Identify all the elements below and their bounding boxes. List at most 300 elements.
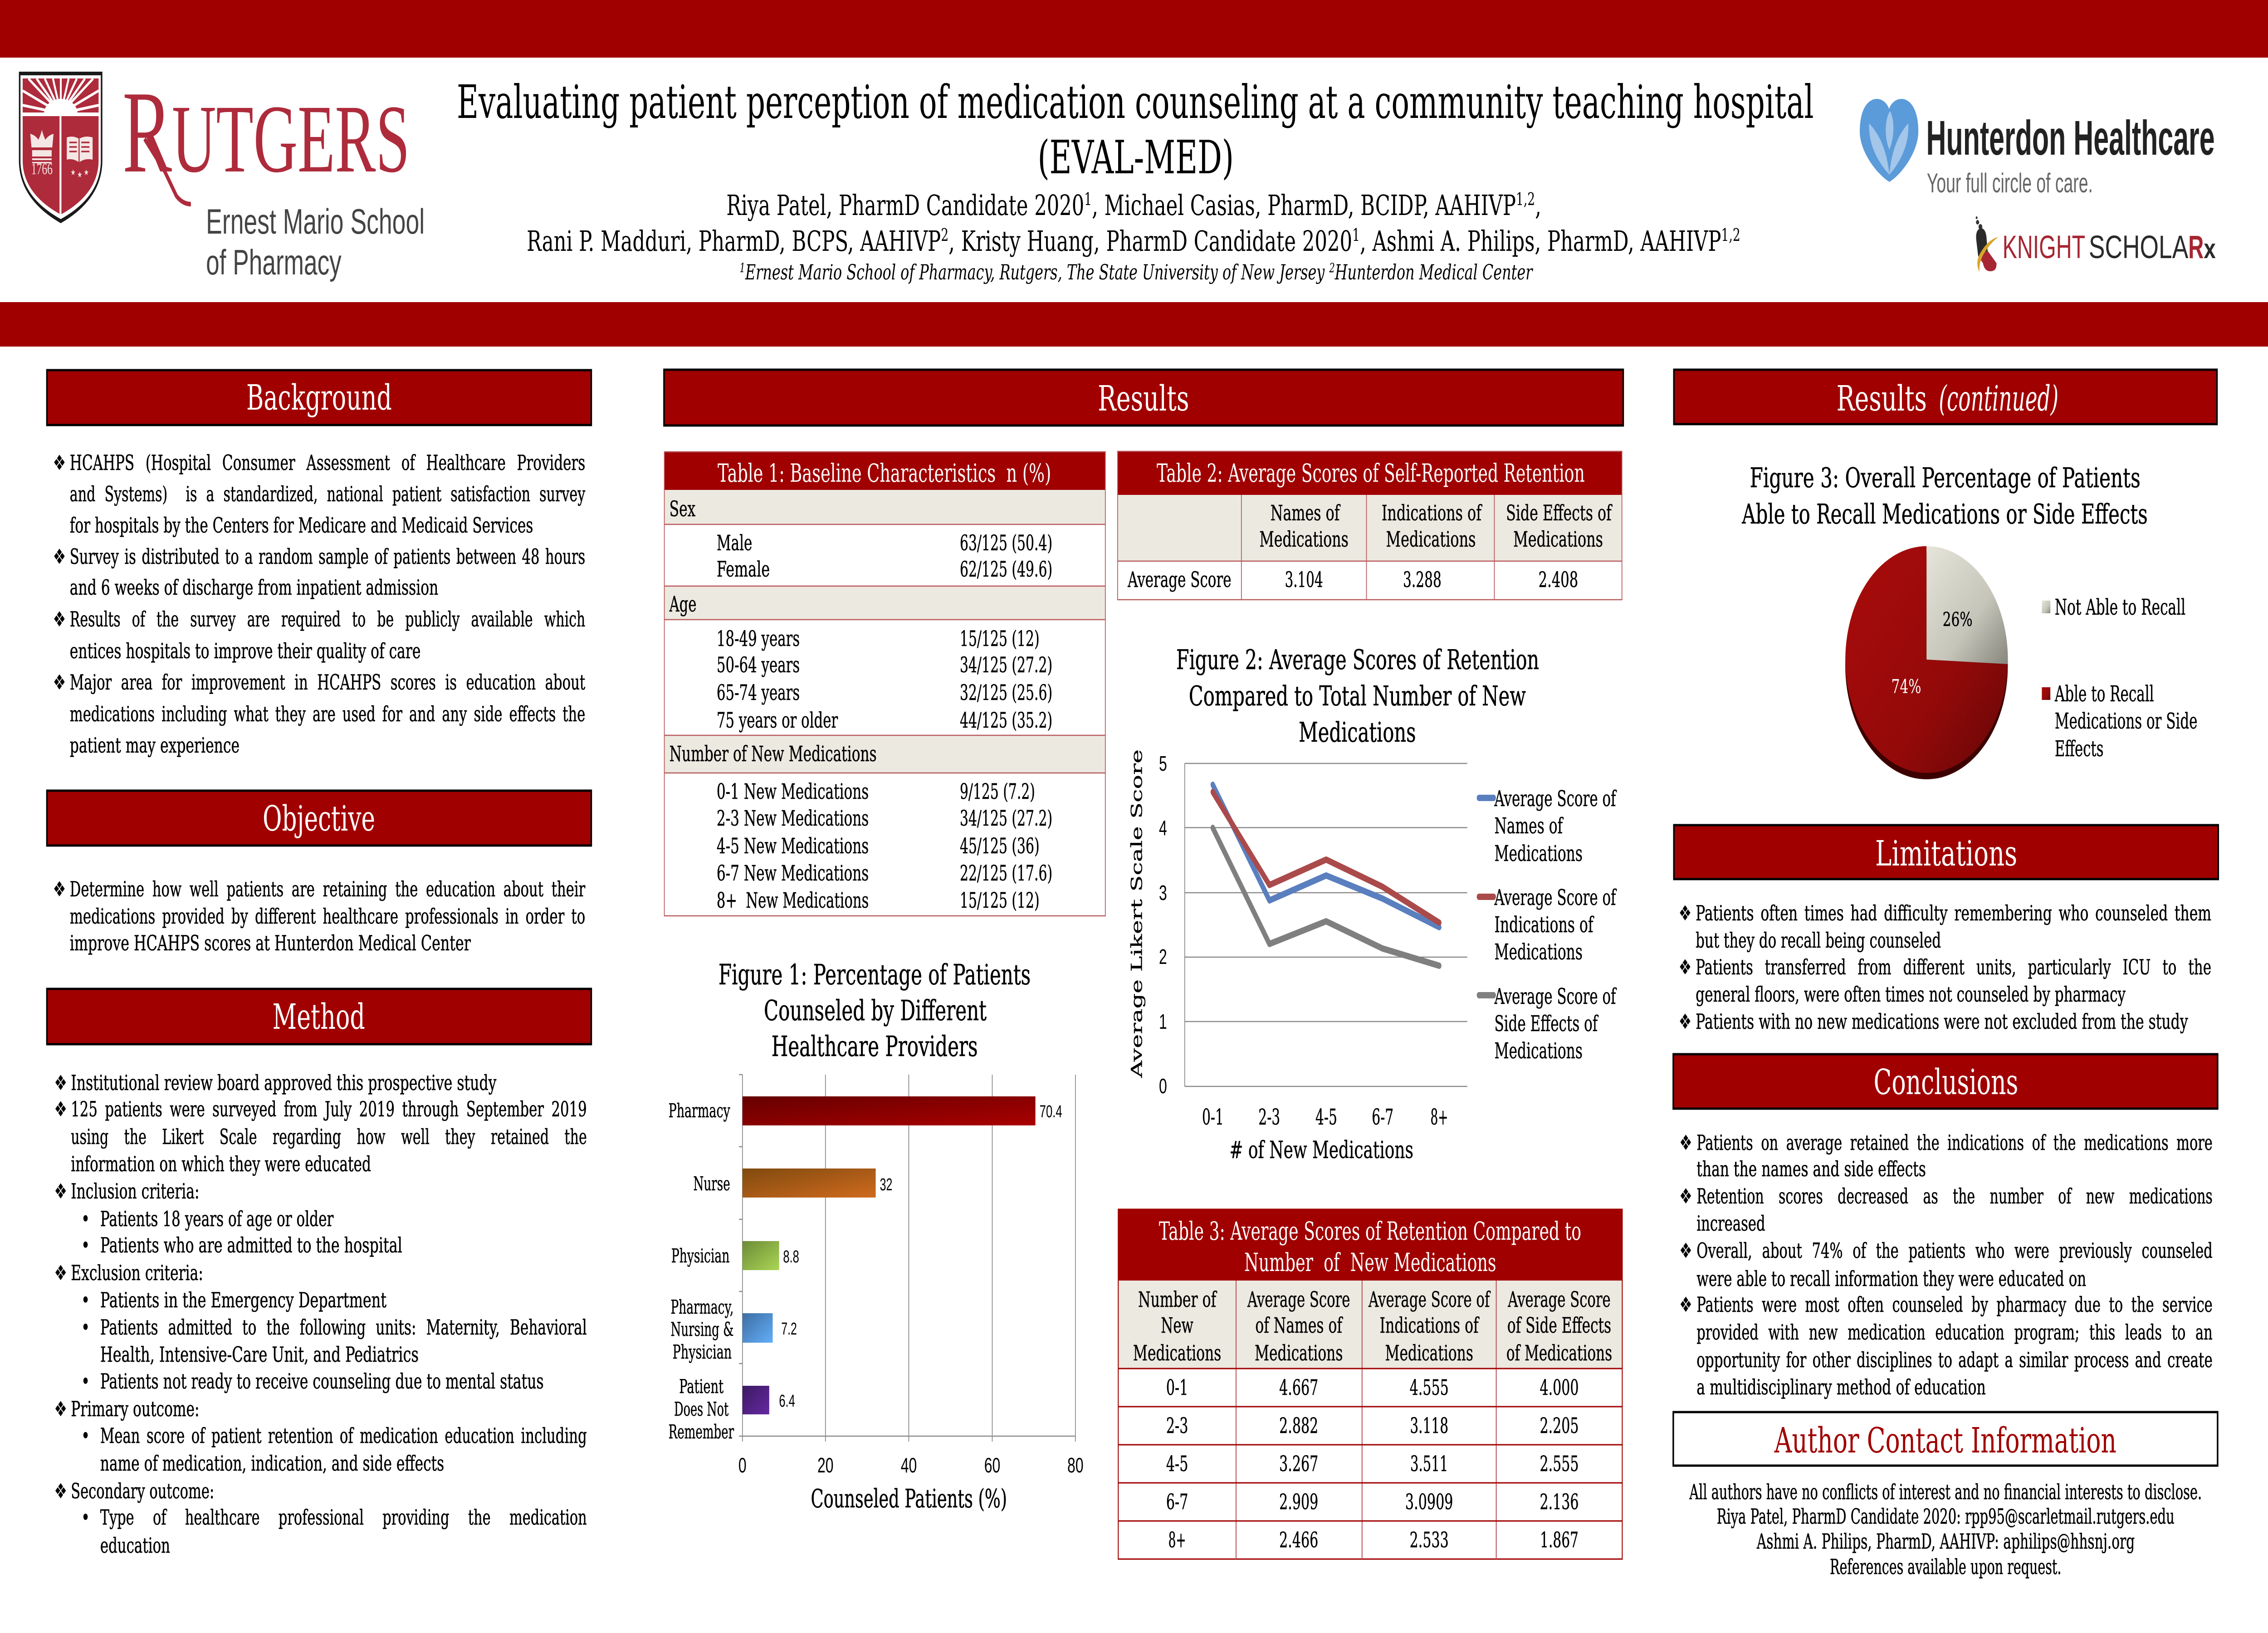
x axis title: Counseled Patients (%) bbox=[811, 1484, 1007, 1514]
table 1 rows: 75 years or older bbox=[717, 708, 838, 733]
category labels: Physician bbox=[673, 1341, 732, 1363]
category labels: Nurse bbox=[693, 1173, 730, 1195]
table 2 column headers: Medications bbox=[1386, 527, 1476, 552]
figure 1 title bbox=[719, 958, 1031, 1063]
table 3 values: 4-5 bbox=[1166, 1451, 1188, 1477]
authors: Rani P. Madduri, PharmD, BCPS, AAHIVP bbox=[527, 225, 938, 258]
table 2: self-reported retention bbox=[1118, 451, 1622, 600]
table 2 column headers: Side Effects of bbox=[1506, 500, 1613, 526]
lower banner bbox=[0, 302, 2268, 347]
table 1 rows: 2-3 New Medications bbox=[717, 806, 869, 831]
heading: objective bbox=[47, 791, 591, 846]
table 1 rows: 6-7 New Medications bbox=[717, 861, 869, 886]
series: indications of medications bbox=[1213, 792, 1439, 923]
table 3 values: 0-1 bbox=[1166, 1375, 1188, 1400]
affiliations: 1 bbox=[740, 260, 745, 275]
x axis labels bbox=[1202, 1105, 1448, 1130]
text block: limitations bullets: general floors, were often times not counseled by pharmacy bbox=[1696, 983, 2126, 1007]
bar: physician bbox=[743, 1241, 779, 1270]
table 3 values: 2.136 bbox=[1540, 1489, 1579, 1515]
logo: KnightScholaRx: x bbox=[2204, 233, 2216, 264]
table 2 column headers: Names of bbox=[1271, 500, 1341, 526]
table 1 rows: 18-49 years bbox=[717, 626, 800, 651]
bar: pharmacy bbox=[743, 1096, 1036, 1125]
icon: heart with leaves bbox=[1860, 99, 1918, 182]
table 3 column headers: Average Score bbox=[1508, 1287, 1611, 1312]
text block: contact details: References available upon request. bbox=[1830, 1555, 2061, 1579]
x axis labels: 2-3 bbox=[1258, 1105, 1280, 1130]
text block: method bullets: Inclusion criteria: bbox=[71, 1179, 200, 1204]
text block: conclusions bullets: ❖ bbox=[1679, 1131, 1692, 1155]
table 3 values: 2.909 bbox=[1279, 1489, 1318, 1515]
text block: conclusions bullets: Overall, about 74% of the patients who were previously counseled bbox=[1696, 1239, 2213, 1263]
text block: objective: ❖ bbox=[53, 877, 66, 902]
text block: limitations bullets: ❖ bbox=[1679, 901, 1691, 926]
text block: method bullets: • bbox=[81, 1233, 90, 1258]
text block: background bullets: ❖ bbox=[53, 670, 66, 695]
category labels: Pharmacy bbox=[669, 1100, 730, 1122]
text block: method bullets: Patients admitted to the following units: Maternity, Behavioral bbox=[100, 1315, 587, 1340]
text block: limitations bullets: ❖ bbox=[1679, 1010, 1691, 1034]
text block: method bullets: Patients 18 years of age or older bbox=[100, 1207, 333, 1232]
text block: conclusions bullets: ❖ bbox=[1679, 1293, 1692, 1317]
chart: figure 3 pie chart bbox=[1741, 462, 2197, 779]
logo: Rutgers Ernest Mario School of Pharmacy bbox=[19, 67, 425, 282]
text block: limitations bullets: ❖ bbox=[1679, 955, 1691, 980]
table 3 column headers: New bbox=[1161, 1313, 1193, 1338]
heading: limitations bbox=[1674, 825, 2218, 879]
y axis labels: 0 bbox=[1159, 1075, 1167, 1098]
category labels: Physician bbox=[671, 1245, 729, 1267]
authors: , bbox=[1535, 189, 1541, 222]
x axis labels: 0 bbox=[738, 1454, 747, 1477]
table 3 column headers: of Names of bbox=[1255, 1313, 1343, 1338]
text block: method bullets: • bbox=[81, 1288, 90, 1313]
legend: Names of bbox=[1494, 813, 1564, 839]
table 1 rows: 15/125 (12) bbox=[960, 626, 1040, 651]
table 3 column headers: of Medications bbox=[1506, 1340, 1612, 1366]
panel: author contact information bbox=[1673, 1412, 2218, 1579]
text block: method bullets: Mean score of patient retention of medication education including bbox=[100, 1424, 587, 1448]
school name: of Pharmacy bbox=[206, 243, 342, 282]
table 3 values: 4.667 bbox=[1279, 1375, 1318, 1400]
table 1 rows: 9/125 (7.2) bbox=[960, 779, 1035, 804]
text block: conclusions bullets: Retention scores decreased as the number of new medications bbox=[1696, 1184, 2213, 1209]
text block: method bullets: Patients in the Emergency Department bbox=[100, 1288, 386, 1313]
text block: background bullets bbox=[53, 451, 586, 758]
text block: method bullets: Health, Intensive-Care Unit, and Pediatrics bbox=[100, 1343, 419, 1367]
table 3 values: 8+ bbox=[1168, 1527, 1186, 1553]
series: names of medications bbox=[1213, 785, 1439, 927]
table 1 rows: 4-5 New Medications bbox=[717, 833, 869, 859]
table 3 values: 2.466 bbox=[1279, 1527, 1318, 1553]
heading: objective: Objective bbox=[263, 798, 375, 839]
text block: method bullets: Type of healthcare professional providing the medication bbox=[100, 1506, 587, 1530]
title: (EVAL-MED) bbox=[1038, 131, 1234, 184]
affiliations: Hunterdon Medical Center bbox=[1334, 260, 1533, 285]
text block: background bullets: ❖ bbox=[53, 451, 66, 475]
text block: method bullets: Secondary outcome: bbox=[71, 1479, 214, 1504]
x axis labels: 8+ bbox=[1430, 1105, 1448, 1130]
table 1 rows: 15/125 (12) bbox=[960, 888, 1040, 913]
text block: method bullets: education bbox=[100, 1534, 170, 1558]
text block: conclusions bullets: ❖ bbox=[1679, 1239, 1692, 1263]
text block: method bullets: name of medication, indication, and side effects bbox=[100, 1452, 444, 1476]
y axis labels: 1 bbox=[1159, 1010, 1167, 1033]
table 1 rows: 44/125 (35.2) bbox=[960, 708, 1052, 733]
text block: conclusions bullets: opportunity for other disciplines to adapt a similar process and create bbox=[1696, 1348, 2213, 1373]
data labels: 8.8 bbox=[783, 1247, 799, 1266]
category labels: Nursing & bbox=[670, 1318, 733, 1340]
text block: background bullets: Survey is distributed to a random sample of patients between 48 hours bbox=[70, 545, 585, 569]
authors: 1 bbox=[1352, 225, 1360, 245]
x axis title: # of New Medications bbox=[1229, 1136, 1413, 1164]
text block: method bullets: ❖ bbox=[54, 1397, 67, 1422]
text block: limitations bullets: Patients often times had difficulty remembering who counseled them bbox=[1696, 901, 2211, 926]
text block: conclusions bullets bbox=[1679, 1131, 2213, 1400]
text block: objective: medications provided by different healthcare professionals in order to bbox=[70, 905, 585, 929]
table 1 rows: Male bbox=[717, 530, 752, 556]
affiliations: Ernest Mario School of Pharmacy, Rutgers, The State University of New Jersey bbox=[745, 260, 1329, 285]
table 1 rows: Age bbox=[669, 592, 696, 617]
authors bbox=[527, 189, 1740, 258]
pie depth bbox=[1845, 552, 2008, 779]
table 3 values: 3.511 bbox=[1410, 1451, 1448, 1477]
text block: conclusions bullets: ❖ bbox=[1679, 1184, 1692, 1209]
y axis labels bbox=[1159, 752, 1167, 1098]
x axis labels: 80 bbox=[1067, 1454, 1084, 1477]
table 3 column headers: Indications of bbox=[1380, 1313, 1480, 1338]
data labels: 70.4 bbox=[1040, 1101, 1062, 1121]
text block: method bullets: Patients who are admitted to the hospital bbox=[100, 1233, 402, 1258]
text block: limitations bullets: Patients with no new medications were not excluded from the study bbox=[1696, 1010, 2188, 1034]
table 3 column headers: Average Score of bbox=[1368, 1287, 1491, 1312]
slice label: 74%: 74% bbox=[1891, 675, 1921, 698]
data labels: 7.2 bbox=[781, 1319, 797, 1338]
data labels: 6.4 bbox=[779, 1391, 795, 1410]
y axis labels: 5 bbox=[1159, 752, 1167, 775]
table 3 values: 4.000 bbox=[1540, 1375, 1579, 1400]
text block: method bullets: • bbox=[81, 1207, 90, 1232]
legend: Average Score of bbox=[1494, 984, 1617, 1009]
text block: background bullets: Results of the survey are required to be publicly available which bbox=[70, 607, 585, 632]
top banner bbox=[0, 0, 2268, 58]
heading: method bbox=[47, 989, 591, 1044]
title bbox=[457, 75, 1814, 184]
table 3 column headers: Medications bbox=[1133, 1340, 1221, 1366]
figure 2 title: Medications bbox=[1299, 717, 1416, 748]
series: side effects of medications bbox=[1213, 828, 1439, 966]
table 3 column headers: Medications bbox=[1385, 1340, 1473, 1366]
figure 3 title bbox=[1741, 462, 2148, 530]
text block: background bullets: patient may experience bbox=[70, 733, 240, 758]
text block: method bullets: ❖ bbox=[54, 1479, 67, 1504]
table 2 values: Average Score bbox=[1127, 567, 1232, 592]
legend: Effects bbox=[2055, 736, 2104, 762]
table 1 rows: Number of New Medications bbox=[670, 741, 877, 767]
category labels: Does Not bbox=[674, 1398, 729, 1420]
table 3 values: 2.533 bbox=[1410, 1527, 1449, 1553]
icon: Rutgers shield: 1766 bbox=[31, 159, 53, 178]
table 3 values: 2.205 bbox=[1540, 1413, 1579, 1438]
figure 1 title: Counseled by Different bbox=[764, 994, 987, 1027]
y axis labels: 4 bbox=[1159, 816, 1167, 840]
heading: author contact information bbox=[1673, 1412, 2218, 1466]
table 3 values: 6-7 bbox=[1166, 1489, 1188, 1515]
icon: Rutgers shield: ★ bbox=[77, 170, 82, 180]
figure 2 title: Figure 2: Average Scores of Retention bbox=[1176, 644, 1539, 676]
legend: Side Effects of bbox=[1494, 1011, 1598, 1037]
legend: Average Score of bbox=[1494, 786, 1617, 812]
title: Evaluating patient perception of medication counseling at a community teaching hospital bbox=[457, 75, 1814, 129]
legend: Indications of bbox=[1494, 912, 1594, 938]
authors: 1,2 bbox=[1516, 189, 1535, 209]
icon: Rutgers shield: ★ bbox=[84, 168, 89, 177]
table 3 heading: Table 3: Average Scores of Retention Compared to bbox=[1159, 1217, 1581, 1246]
heading: conclusions bbox=[1673, 1054, 2218, 1109]
table 2 column headers: Indications of bbox=[1382, 500, 1482, 526]
slice: not able to recall bbox=[1926, 546, 2008, 664]
bar: nurse bbox=[743, 1169, 876, 1198]
table 3 values: 1.867 bbox=[1540, 1527, 1579, 1553]
wordmark: Rutgers: RUTGERS bbox=[122, 67, 410, 197]
heading: background: Background bbox=[246, 377, 392, 418]
table 2 values: 3.288 bbox=[1403, 567, 1442, 592]
table 1 rows: 62/125 (49.6) bbox=[960, 557, 1052, 582]
text block: method bullets bbox=[54, 1071, 587, 1558]
figure 2 title: Compared to Total Number of New bbox=[1189, 680, 1526, 712]
table 1: baseline characteristics bbox=[665, 452, 1105, 916]
table 3 heading bbox=[1159, 1217, 1581, 1277]
x axis labels bbox=[738, 1454, 1084, 1477]
table 1 rows: 34/125 (27.2) bbox=[960, 806, 1052, 831]
authors: 1 bbox=[1084, 189, 1092, 209]
table 1 rows: 34/125 (27.2) bbox=[960, 652, 1052, 678]
category labels: Remember bbox=[669, 1421, 734, 1443]
panel: method bbox=[47, 989, 591, 1558]
table 1 heading: Table 1: Baseline Characteristics n (%) bbox=[718, 459, 1051, 488]
table 2 values bbox=[1127, 567, 1578, 592]
table 1 rows: 0-1 New Medications bbox=[717, 779, 869, 804]
text block: background bullets: ❖ bbox=[53, 545, 66, 569]
legend: Not Able to Recall bbox=[2055, 595, 2185, 620]
data labels bbox=[779, 1101, 1062, 1410]
table 3 column headers: Medications bbox=[1255, 1340, 1343, 1366]
table 3 values: 3.0909 bbox=[1405, 1489, 1453, 1515]
legend: Medications bbox=[1494, 841, 1583, 866]
bar: patient does not remember bbox=[743, 1386, 769, 1414]
text block: background bullets: HCAHPS (Hospital Consumer Assessment of Healthcare Providers bbox=[70, 451, 585, 475]
text block: method bullets: Institutional review board approved this prospective study bbox=[71, 1071, 497, 1095]
slice: able to recall bbox=[1845, 546, 2008, 773]
text block: method bullets: • bbox=[81, 1369, 90, 1394]
authors: 1,2 bbox=[1721, 225, 1740, 245]
category labels: Patient bbox=[679, 1375, 723, 1398]
text block: conclusions bullets: than the names and side effects bbox=[1696, 1157, 1926, 1182]
affiliations: 2 bbox=[1329, 260, 1335, 275]
x axis labels: 0-1 bbox=[1202, 1105, 1224, 1130]
x axis labels: 20 bbox=[817, 1454, 834, 1477]
text block: background bullets: medications including what they are used for and any side effects the bbox=[70, 702, 585, 727]
table 1 rows: Female bbox=[717, 557, 770, 582]
legend bbox=[1479, 786, 1617, 1064]
table 1 rows: 63/125 (50.4) bbox=[960, 530, 1052, 556]
heading: conclusions: Conclusions bbox=[1874, 1061, 2018, 1103]
figure 3 title: Figure 3: Overall Percentage of Patients bbox=[1750, 462, 2141, 494]
slice label: 26%: 26% bbox=[1943, 608, 1973, 631]
y axis labels: 3 bbox=[1159, 881, 1167, 905]
text block: background bullets: ❖ bbox=[53, 607, 66, 632]
text block: method bullets: • bbox=[81, 1506, 90, 1530]
text block: limitations bullets bbox=[1679, 901, 2211, 1034]
chart: figure 2 line chart bbox=[1128, 644, 1617, 1164]
table 1 rows: 65-74 years bbox=[717, 680, 800, 705]
table 3: retention by number of new medications bbox=[1118, 1209, 1622, 1559]
x axis labels: 4-5 bbox=[1315, 1105, 1337, 1130]
table 3 column headers bbox=[1133, 1287, 1612, 1366]
table 1 rows: Sex bbox=[670, 496, 695, 522]
category labels bbox=[669, 1100, 734, 1443]
text block: method bullets: ❖ bbox=[54, 1261, 67, 1286]
text block: method bullets: using the Likert Scale regarding how well they retained the bbox=[71, 1125, 587, 1149]
table 2 heading: Table 2: Average Scores of Self-Reported Retention bbox=[1157, 459, 1585, 488]
text block: objective: improve HCAHPS scores at Hunterdon Medical Center bbox=[70, 931, 471, 956]
logo: KnightScholaRx bbox=[1976, 216, 2216, 272]
text block: method bullets: Primary outcome: bbox=[71, 1397, 200, 1422]
logo: KnightScholaRx: KNIGHT bbox=[2003, 229, 2085, 265]
figure 1 title: Healthcare Providers bbox=[772, 1030, 978, 1063]
text block: conclusions bullets: provided with new medication education program; this leads to an bbox=[1696, 1320, 2213, 1345]
text block: method bullets: Patients not ready to receive counseling due to mental status bbox=[100, 1369, 544, 1394]
table 2 column headers: Medications bbox=[1513, 527, 1603, 552]
heading: results: Results bbox=[1098, 378, 1189, 419]
text block: background bullets: and 6 weeks of discharge from inpatient admission bbox=[70, 576, 438, 600]
heading: results continued bbox=[1674, 370, 2217, 424]
heading: results continued: (continued) bbox=[1939, 378, 2058, 419]
heading: background bbox=[47, 370, 591, 425]
text block: background bullets: and Systems) is a standardized, national patient satisfaction survey bbox=[70, 482, 586, 507]
heading: method: Method bbox=[273, 996, 365, 1037]
panel: conclusions bbox=[1673, 1054, 2218, 1400]
category labels: Pharmacy, bbox=[670, 1296, 733, 1318]
text block: limitations bullets: but they do recall being counseled bbox=[1696, 929, 1941, 953]
table 2 column headers: Medications bbox=[1259, 527, 1349, 552]
text block: contact details: All authors have no conflicts of interest and no financial interests to disclose. bbox=[1689, 1480, 2202, 1505]
table 3 column headers: of Side Effects bbox=[1507, 1313, 1611, 1338]
logo: KnightScholaRx: R bbox=[2188, 229, 2204, 265]
text block: conclusions bullets: were able to recall information they were educated on bbox=[1696, 1267, 2086, 1291]
text block: method bullets: 125 patients were surveyed from July 2019 through September 2019 bbox=[71, 1097, 587, 1122]
bar: pharmacy, nursing and physician bbox=[743, 1313, 772, 1343]
text block: contact details bbox=[1689, 1480, 2202, 1579]
authors: , Michael Casias, PharmD, BCIDP, AAHIVP bbox=[1092, 189, 1516, 222]
text block: method bullets: Exclusion criteria: bbox=[71, 1261, 203, 1286]
panel: limitations bbox=[1674, 825, 2218, 1034]
chart: figure 1 bar chart bbox=[669, 958, 1084, 1514]
legend: Medications bbox=[1494, 1038, 1583, 1064]
table 3 column headers: Number of bbox=[1138, 1287, 1217, 1312]
panel: background bbox=[47, 370, 591, 758]
table 3 values bbox=[1166, 1375, 1579, 1553]
legend: Medications or Side bbox=[2055, 709, 2197, 734]
table 1 rows: 8+ New Medications bbox=[717, 888, 869, 913]
heading: author contact information: Author Contact Information bbox=[1774, 1420, 2116, 1461]
text block: background bullets: entices hospitals to improve their quality of care bbox=[70, 639, 420, 664]
text block: conclusions bullets: Patients were most often counseled by pharmacy due to the service bbox=[1696, 1293, 2213, 1317]
logo: Hunterdon Healthcare: Your full circle of care. bbox=[1927, 167, 2093, 198]
figure 2 title bbox=[1176, 644, 1539, 748]
text block: objective bbox=[53, 877, 585, 956]
table 1 rows: 50-64 years bbox=[717, 652, 800, 678]
x axis labels: 60 bbox=[984, 1454, 1000, 1477]
legend: Able to Recall bbox=[2054, 681, 2154, 707]
figure 1 title: Figure 1: Percentage of Patients bbox=[719, 958, 1031, 991]
text block: contact details: Riya Patel, PharmD Candidate 2020: rpp95@scarletmail.rutgers.edu bbox=[1717, 1505, 2175, 1529]
authors: , Kristy Huang, PharmD Candidate 2020 bbox=[948, 225, 1352, 258]
heading: results continued: Results bbox=[1837, 378, 1927, 419]
text block: conclusions bullets: Patients on average retained the indications of the medications more bbox=[1696, 1131, 2213, 1155]
legend bbox=[2042, 595, 2197, 762]
text block: method bullets: • bbox=[81, 1424, 90, 1448]
data labels: 32 bbox=[880, 1174, 892, 1194]
legend: Medications bbox=[1494, 939, 1583, 965]
x axis labels: 6-7 bbox=[1372, 1105, 1393, 1130]
text block: method bullets: ❖ bbox=[54, 1179, 67, 1204]
text block: method bullets: ❖ bbox=[54, 1097, 67, 1122]
panel: objective bbox=[47, 791, 591, 956]
table 3 values: 2.555 bbox=[1540, 1451, 1579, 1477]
y axis labels: 2 bbox=[1159, 945, 1167, 968]
icon: Rutgers shield bbox=[19, 72, 103, 223]
authors: Riya Patel, PharmD Candidate 2020 bbox=[726, 189, 1083, 222]
figure 3 title: Able to Recall Medications or Side Effects bbox=[1741, 499, 2148, 530]
legend: Average Score of bbox=[1494, 885, 1617, 910]
y axis title: Average Likert Scale Score bbox=[1128, 749, 1145, 1078]
x axis labels: 40 bbox=[901, 1454, 917, 1477]
text block: contact details: Ashmi A. Philips, PharmD, AAHIVP: aphilips@hhsnj.org bbox=[1756, 1530, 2135, 1554]
authors: , Ashmi A. Philips, PharmD, AAHIVP bbox=[1360, 225, 1721, 258]
table 3 values: 3.267 bbox=[1279, 1451, 1318, 1477]
table 3 column headers: Average Score bbox=[1247, 1287, 1350, 1312]
table 2 values: 2.408 bbox=[1539, 567, 1578, 592]
logo: KnightScholaRx: SCHOLA bbox=[2089, 229, 2189, 265]
table 3 values: 3.118 bbox=[1410, 1413, 1448, 1438]
heading: limitations: Limitations bbox=[1875, 833, 2017, 874]
heading: results bbox=[664, 370, 1623, 425]
text block: limitations bullets: Patients transferred from different units, particularly ICU to the bbox=[1696, 955, 2211, 980]
table 3 heading: Number of New Medications bbox=[1244, 1248, 1496, 1277]
text block: conclusions bullets: increased bbox=[1696, 1212, 1765, 1236]
text block: conclusions bullets: a multidisciplinary method of education bbox=[1696, 1375, 1986, 1400]
icon: capsule with ribbon bbox=[1976, 216, 1999, 272]
text block: method bullets: information on which they were educated bbox=[71, 1152, 371, 1177]
text block: background bullets: for hospitals by the Centers for Medicare and Medicaid Services bbox=[70, 513, 533, 538]
table 1 rows: 22/125 (17.6) bbox=[960, 861, 1052, 886]
school name bbox=[206, 202, 425, 282]
authors: 2 bbox=[941, 225, 948, 245]
icon: Rutgers shield: ★ bbox=[71, 168, 76, 177]
table 2 values: 3.104 bbox=[1285, 567, 1323, 592]
text block: method bullets: ❖ bbox=[54, 1071, 67, 1095]
table 3 values: 2-3 bbox=[1166, 1413, 1188, 1438]
text block: objective: Determine how well patients are retaining the education about their bbox=[70, 877, 585, 902]
text block: method bullets: • bbox=[81, 1315, 90, 1340]
table 1 rows: 32/125 (25.6) bbox=[960, 680, 1052, 705]
table 3 values: 2.882 bbox=[1279, 1413, 1318, 1438]
table 2 column headers bbox=[1259, 500, 1613, 552]
text block: background bullets: Major area for improvement in HCAHPS scores is education about bbox=[70, 670, 585, 695]
school name: Ernest Mario School bbox=[206, 202, 425, 241]
